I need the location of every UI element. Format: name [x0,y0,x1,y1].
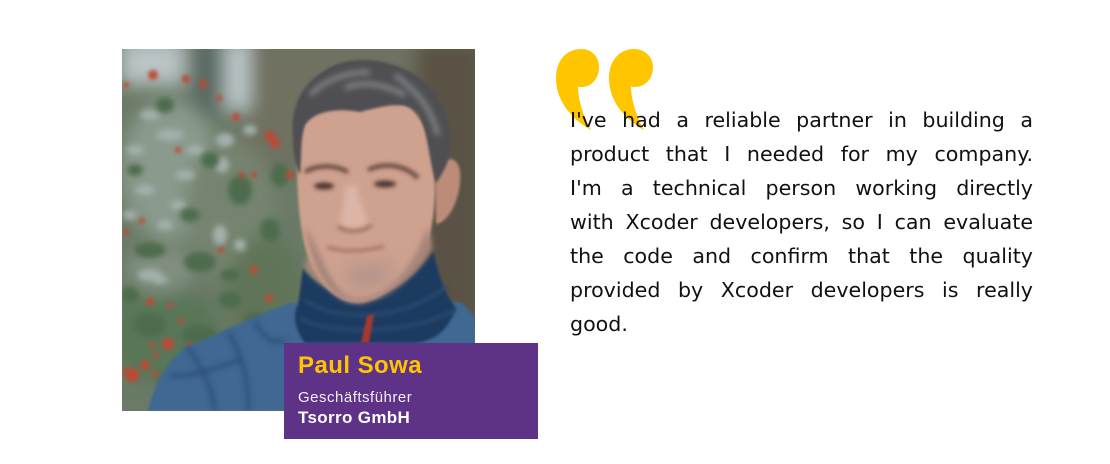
zipper pull [361,314,374,343]
hair [293,60,451,183]
person name: Paul Sowa [298,352,422,379]
icon: quotation mark [556,49,653,130]
jacket collar [295,251,456,343]
job title: Geschäftsführer [298,389,412,406]
testimonial text: the code and confirm that the quality [570,244,1033,268]
face [297,95,435,303]
ear [435,159,460,224]
neck [302,232,435,296]
testimonial text: I'm a technical person working directly [570,176,1033,200]
jacket [148,300,475,411]
testimonial text: provided by Xcoder developers is really [570,278,1033,302]
name card [284,343,538,439]
portrait photo [122,49,475,411]
testimonial text: with Xcoder developers, so I can evaluate [570,210,1033,234]
eyebrows, eyes, mouth [305,166,418,251]
testimonial text: product that I needed for my company. [570,142,1033,166]
testimonial text: good. [570,312,628,336]
company: Tsorro GmbH [298,408,410,427]
testimonial text: I've had a reliable partner in building a [570,108,1033,132]
